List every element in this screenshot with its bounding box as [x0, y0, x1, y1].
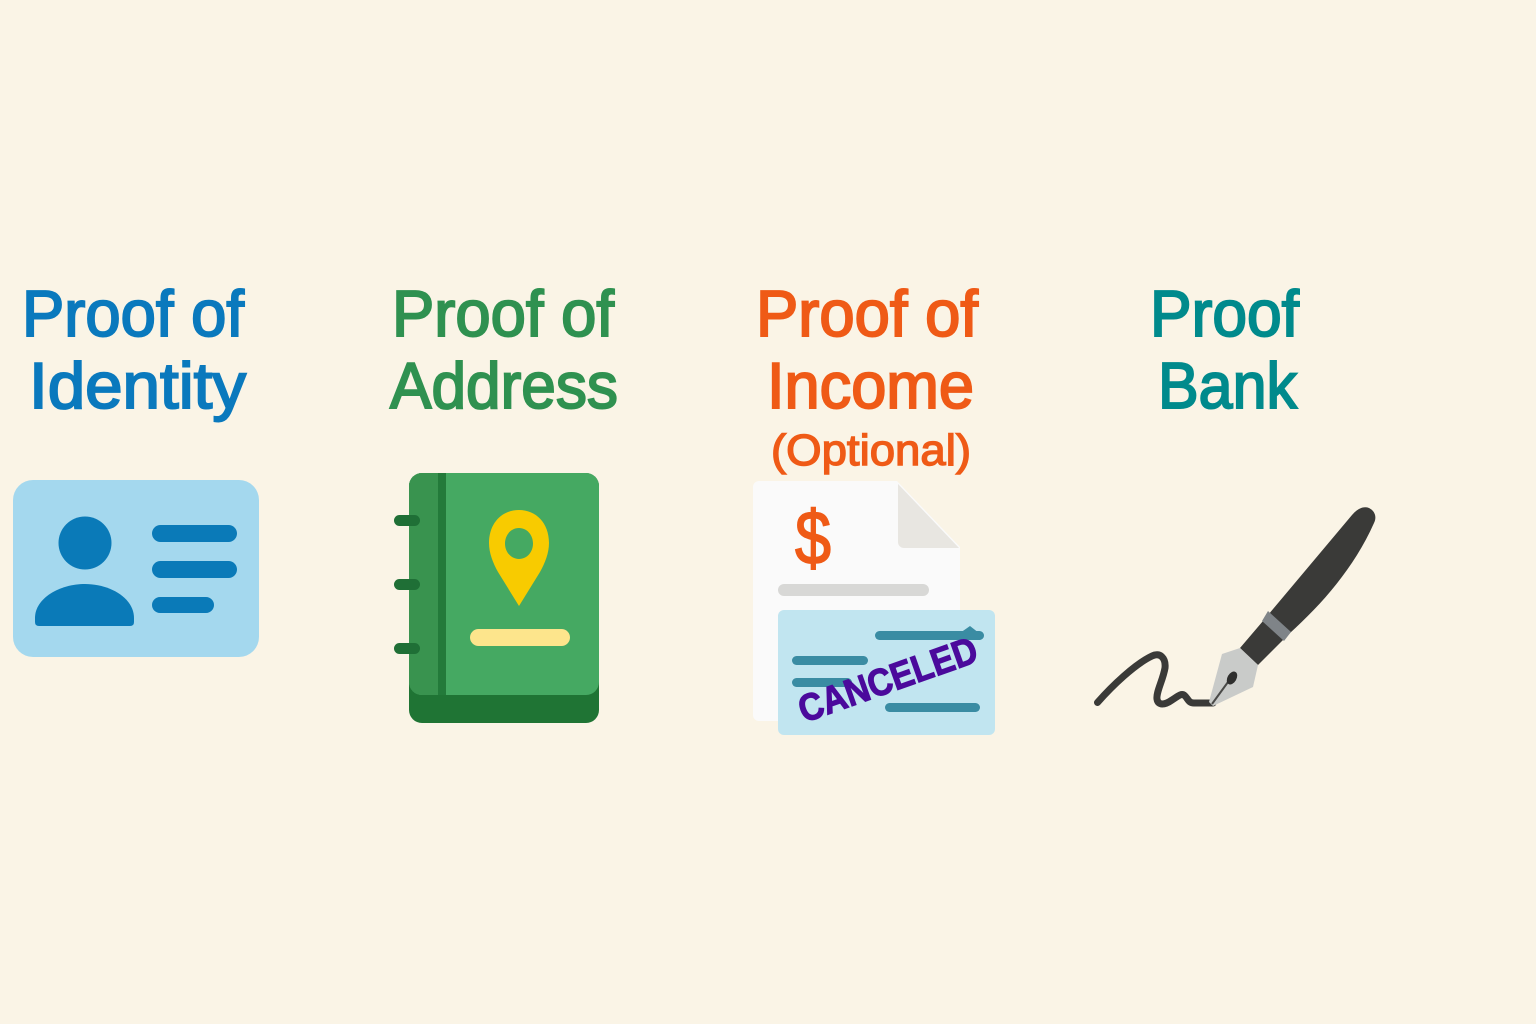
heading: proof of address: Address: [390, 349, 618, 422]
heading: proof of identity: [22, 277, 247, 422]
heading: proof of identity: Identity: [29, 349, 247, 422]
heading: proof of income: Income: [767, 349, 974, 422]
panel: proof of identity: [13, 277, 259, 657]
heading: proof bank: [1150, 277, 1300, 422]
heading: proof of income: (Optional): [771, 426, 971, 475]
icon: address book: [394, 473, 599, 723]
heading: proof of address: [390, 277, 618, 422]
icon: id card: [13, 480, 259, 657]
heading: proof bank: Bank: [1158, 349, 1297, 422]
panel: proof of bank: [1098, 277, 1375, 706]
panel: proof of income: [753, 277, 995, 735]
icon: income document: $: [795, 496, 831, 581]
heading: proof of income: Proof of: [756, 277, 979, 350]
heading: proof of address: Proof of: [392, 277, 615, 350]
heading: proof of income: [756, 277, 979, 475]
icon: canceled check: CANCELED: [793, 629, 983, 731]
panel: proof of address: [390, 277, 618, 723]
heading: proof bank: Proof: [1150, 277, 1300, 350]
icon: income document: [753, 481, 960, 721]
heading: proof of identity: Proof of: [22, 277, 245, 350]
icon: fountain pen and signature: [1098, 507, 1375, 706]
